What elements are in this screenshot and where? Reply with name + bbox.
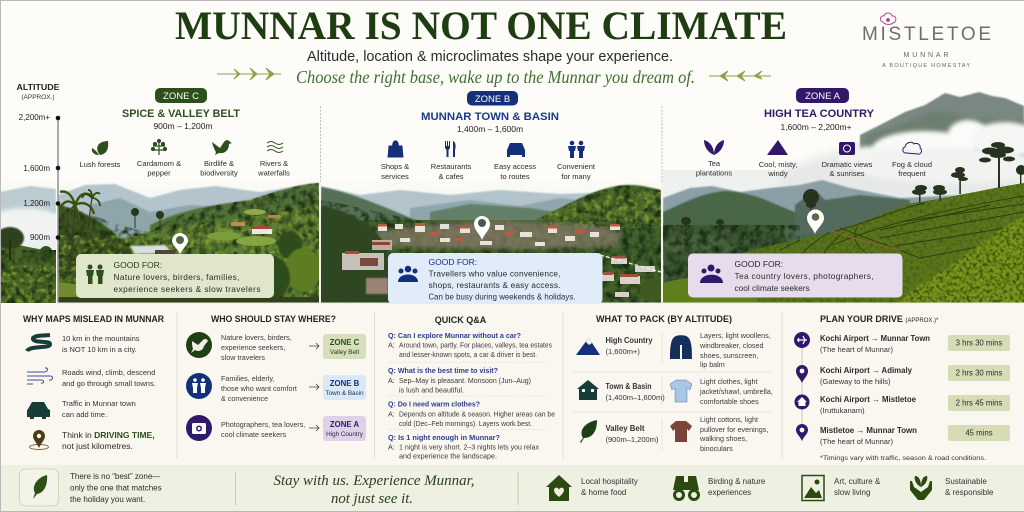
question 4: 1 night is very short. 2–3 nights lets you relax	[399, 442, 539, 452]
text: high country packing: Layers, light woollens,	[700, 331, 771, 340]
text: shops	[381, 162, 409, 181]
text: cardamom: pepper	[147, 168, 171, 178]
text: sustainable: & responsible	[945, 488, 994, 497]
text: cardamom: Cardamom &	[137, 159, 181, 168]
zone C pill	[155, 88, 207, 103]
text: tea	[696, 159, 732, 178]
photo: zone C valley landscape	[58, 170, 321, 303]
time 4: 45 mins	[965, 428, 993, 438]
photo: zone B town landscape	[321, 184, 661, 302]
icon: tea leaves	[704, 140, 724, 155]
text: shops: Shops &	[381, 162, 409, 171]
text: restaurants: Restaurants	[431, 162, 471, 171]
map pin zone C	[172, 233, 188, 254]
text: birdlife: biodiversity	[200, 168, 238, 178]
text: no best zone: only the one that matches	[70, 484, 162, 492]
altitude scale: 900m	[30, 233, 50, 242]
logo flower	[880, 13, 896, 24]
icon: cloud	[903, 142, 921, 154]
text: birding: Birding & nature	[708, 477, 766, 486]
text: fog	[892, 160, 932, 178]
text: valley belt: (900m–1,200m)	[606, 435, 659, 444]
arrow	[309, 425, 319, 431]
zone dividers	[320, 106, 662, 182]
time 1: 3 hrs 30 mins	[956, 338, 1002, 348]
heading: WHY MAPS MISLEAD IN MUNNAR	[23, 314, 164, 324]
callout: zone A good for: GOOD FOR:	[734, 259, 783, 269]
photo: zone A tea country with mountain	[663, 92, 1024, 303]
altitude heading: ALTITUDE	[16, 83, 60, 92]
icon: group	[700, 264, 723, 283]
route 3: Kochi Airport → Mistletoe	[820, 395, 917, 404]
text: restaurants	[431, 162, 471, 181]
icon: restaurant	[445, 141, 456, 157]
text: sustainable: Sustainable	[945, 477, 987, 486]
zone B heading: MUNNAR TOWN & BASIN	[421, 111, 559, 123]
question 4: Q: Is 1 night enough in Munnar?	[388, 433, 500, 442]
icon: leaf	[580, 420, 597, 443]
zone B tag: ZONE B	[330, 379, 360, 388]
text: traffic: can add time.	[62, 410, 107, 419]
text: hospitality: & home food	[581, 488, 626, 497]
zone C tag	[323, 334, 366, 359]
text: town and basin: (1,400m–1,600m)	[606, 393, 665, 402]
text: high country: High Country	[606, 336, 653, 345]
icon: t-shirt	[670, 421, 692, 442]
question 4: A:	[388, 442, 395, 452]
route 2: Kochi Airport → Adimaly	[820, 366, 913, 375]
time 2	[948, 365, 1010, 381]
text: town packing: jacket/shawl, umbrella,	[699, 387, 773, 396]
route 1	[820, 334, 930, 354]
footnote: *Timings vary with traffic, season & road conditions.	[820, 455, 986, 462]
text: families	[221, 374, 297, 403]
text: fog: frequent	[898, 169, 927, 178]
icon: car	[507, 143, 525, 157]
zone A tag: ZONE A	[330, 420, 359, 429]
question 2: is lush and beautiful.	[399, 386, 464, 394]
icon: pin	[796, 365, 808, 383]
icon: home with heart	[546, 475, 572, 501]
script closing line: Stay with us. Experience Munnar,	[274, 473, 474, 489]
text: rivers	[257, 159, 290, 178]
question 3: Depends on altitude & season. Higher areas can be	[399, 410, 555, 418]
icon: family badge	[186, 373, 212, 399]
panel: zone C header: Lush forests	[80, 160, 121, 169]
question 4: and experience the landscape.	[399, 452, 497, 460]
text: photographers: cool climate seekers	[221, 430, 287, 439]
route 2	[820, 366, 913, 386]
icon: pin	[796, 424, 808, 441]
route 3: (Iruttukanam)	[820, 406, 865, 415]
text: restaurants: & cafes	[438, 172, 464, 181]
text: tea: Tea	[708, 159, 721, 168]
icon: car	[27, 402, 50, 419]
zone C heading: SPICE & VALLEY BELT	[122, 108, 240, 120]
icon: mountains	[576, 338, 600, 355]
text: roads	[62, 368, 156, 388]
script tagline: Choose the right base, wake up to the Munnar you dream of.	[296, 67, 695, 87]
text: driving time	[62, 430, 155, 451]
icon: cardamom and pepper	[152, 140, 166, 155]
zone A altitude: 1,600m – 2,200m+	[780, 122, 852, 132]
time 1	[948, 335, 1010, 351]
text: dramatic: & sunrises	[829, 169, 865, 178]
callout: zone B good for: GOOD FOR:	[428, 257, 477, 267]
zone B tag	[323, 375, 366, 400]
text: valley packing: pullover for evenings,	[700, 425, 768, 434]
panel: quick Q&A	[388, 315, 555, 460]
zone B pill: ZONE B	[475, 94, 510, 105]
text: hospitality: Local hospitality	[581, 477, 638, 486]
question 2: A:	[388, 376, 395, 385]
icon: hands with plant	[910, 476, 932, 500]
text: high country packing: windbreaker, closed	[699, 341, 764, 350]
text: families: Families, elderly,	[221, 374, 274, 383]
logo place: MUNNAR	[904, 52, 948, 59]
panel: what to pack	[572, 314, 773, 453]
question 2: Sep–May is pleasant. Monsoon (Jun–Aug)	[399, 376, 531, 385]
text: nature lovers: Nature lovers, birders,	[221, 333, 292, 342]
zone A tag	[323, 416, 366, 441]
time 3	[948, 395, 1010, 411]
text: traffic: Traffic in Munnar town	[62, 399, 136, 408]
text: nature lovers: experience seekers,	[221, 343, 285, 352]
callout: zone B good for: Travellers who value convenience,	[428, 268, 560, 278]
text: no best zone: the holiday you want.	[70, 495, 145, 504]
text: rivers: Rivers &	[260, 159, 288, 168]
altitude scale: 1,600m	[23, 164, 50, 173]
lower section background	[1, 304, 1024, 465]
text: art	[834, 477, 881, 497]
zone A pill	[796, 88, 849, 103]
text: photographers	[221, 420, 305, 439]
text: valley packing	[699, 415, 768, 453]
route 2: (Gateway to the hills)	[820, 377, 891, 386]
text: high country packing	[699, 331, 771, 369]
text: birdlife: Birdlife &	[204, 159, 234, 168]
text: easy access: to routes	[500, 172, 530, 181]
callout: zone B good for: Can be busy during weekends & holidays.	[428, 292, 576, 302]
icon: winding road	[27, 335, 50, 351]
text: families: & convenience	[221, 394, 268, 403]
zone C tag: Valley Belt	[330, 349, 359, 356]
text: driving time: not just kilometres.	[62, 441, 133, 451]
icon: location pin	[30, 430, 48, 450]
zone C tag: ZONE C	[330, 338, 360, 347]
zone B altitude: 1,400m – 1,600m	[457, 124, 523, 134]
text: driving time: Think in DRIVING TIME,	[62, 430, 155, 440]
icon: people	[86, 264, 104, 284]
arrow	[309, 384, 319, 390]
text: shops: services	[381, 172, 409, 181]
panel: why maps mislead	[23, 314, 164, 451]
text: birding	[708, 477, 766, 497]
text: distance: 10 km in the mountains	[62, 334, 140, 343]
arrow	[309, 343, 319, 349]
callout: zone C good for: experience seekers & slow travelers	[114, 284, 260, 294]
zone A tag: High Country	[326, 431, 364, 438]
text: cool	[759, 160, 797, 178]
route 1: (The heart of Munnar)	[820, 345, 893, 354]
zone C pill: ZONE C	[163, 91, 199, 102]
title: MUNNAR IS NOT ONE CLIMATE	[175, 3, 787, 48]
callout: zone A good for: Tea country lovers, photographers,	[734, 271, 874, 281]
icon: jacket	[670, 335, 692, 359]
text: valley belt: Valley Belt	[606, 424, 645, 433]
text: art: slow living	[834, 488, 870, 497]
text: rivers: waterfalls	[257, 168, 290, 178]
subtitle: Altitude, location & microclimates shape your experience.	[307, 48, 673, 65]
icon: binoculars	[673, 476, 700, 501]
icon: picture	[802, 476, 824, 500]
text: families: those who want comfort	[221, 384, 297, 393]
decorative leaf sprig left	[217, 68, 281, 80]
icon: mountain	[767, 140, 788, 155]
time 2: 2 hrs 30 mins	[956, 368, 1002, 378]
callout: zone C good for: Nature lovers, birders, families,	[114, 272, 240, 282]
text: cool: windy	[767, 169, 788, 178]
panel: zone C header	[80, 88, 290, 178]
text: fog: Fog & cloud	[892, 160, 932, 169]
text: art: Art, culture &	[834, 477, 881, 486]
text: valley packing: walking shoes,	[699, 434, 747, 443]
decorative leaf sprig right	[709, 71, 771, 81]
altitude scale: 1,200m	[23, 199, 50, 208]
question 4	[388, 433, 539, 460]
icon: group	[398, 266, 418, 282]
question 2	[388, 366, 531, 394]
icon: camera	[839, 142, 855, 155]
icon: shopping bag	[388, 141, 403, 157]
callout: zone C good for: GOOD FOR:	[114, 260, 162, 270]
text: valley belt	[606, 424, 659, 444]
panel: zone B header	[381, 91, 596, 181]
zone B tag: Town & Basin	[325, 390, 364, 397]
text: traffic	[62, 399, 136, 419]
text: hospitality	[581, 477, 638, 497]
text: high country packing: shoes, sunscreen,	[700, 351, 758, 360]
script closing line	[274, 473, 474, 507]
icon: wind	[27, 368, 53, 384]
icon: camera badge	[186, 415, 212, 441]
text: no best zone	[70, 472, 162, 504]
text: town and basin	[606, 382, 665, 402]
logo wordmark: MISTLETOE	[862, 24, 991, 45]
text: convenient	[557, 162, 596, 181]
text: birding: experiences	[708, 488, 751, 497]
map pin zone A	[807, 210, 824, 234]
cover fade above photos	[0, 170, 660, 184]
text: cool: Cool, misty,	[759, 160, 797, 169]
icon: two people	[568, 141, 585, 158]
callout: zone C good for	[76, 254, 274, 298]
route 3	[820, 395, 917, 415]
text: high country: (1,600m+)	[606, 347, 640, 356]
route 4	[820, 426, 917, 446]
text: tea: plantations	[696, 168, 732, 178]
icon: rivers	[267, 142, 283, 152]
icon: home	[794, 394, 810, 410]
text: sustainable	[945, 477, 994, 497]
altitude scale: (APPROX.)	[21, 94, 55, 101]
altitude scale: 2,200m+	[19, 113, 50, 122]
question 3: cold (Dec–Feb mornings). Layers work best.	[399, 419, 532, 428]
question 1: Around town, partly. For places, valleys, tea estates	[399, 340, 552, 350]
text: high country packing: lip balm	[700, 360, 725, 369]
icon: shirt	[670, 380, 692, 402]
question 1: Q: Can I explore Munnar without a car?	[388, 331, 521, 340]
zone A pill: ZONE A	[805, 91, 841, 102]
text: distance	[62, 334, 140, 354]
text: dramatic: Dramatic views	[822, 160, 873, 169]
time 4	[948, 425, 1010, 441]
panel: plan your drive	[794, 314, 1010, 462]
question 1: A:	[388, 340, 395, 350]
callout: zone A good for: cool climate seekers	[734, 283, 810, 293]
text: town packing	[699, 377, 773, 406]
callout: zone A good for	[688, 254, 902, 298]
text: birdlife	[200, 159, 238, 178]
text: town packing: comfortable shoes	[700, 397, 759, 406]
panel: zone A header	[696, 88, 932, 178]
icon: bird	[212, 140, 232, 155]
icon: leaf badge	[20, 469, 58, 506]
text: town packing: Light clothes, light	[700, 377, 758, 386]
zone B pill	[467, 91, 518, 106]
zone A heading: HIGH TEA COUNTRY	[764, 108, 875, 120]
heading: PLAN YOUR DRIVE (APPROX.)*	[820, 314, 939, 324]
panel: footer band	[1, 465, 1024, 512]
icon: lush forests	[92, 141, 108, 155]
question 1: and lesser-known spots, a car & driver is best.	[399, 350, 537, 359]
route 4: Mistletoe → Munnar Town	[820, 426, 917, 435]
heading: WHAT TO PACK (BY ALTITUDE)	[596, 314, 732, 324]
text: valley packing: binoculars	[700, 444, 733, 453]
icon: house	[577, 380, 599, 400]
text: convenient: Convenient	[557, 162, 596, 171]
heading: QUICK Q&A	[435, 315, 487, 325]
text: roads: Roads wind, climb, descend	[62, 368, 155, 377]
question 3: A:	[388, 410, 395, 418]
zone C altitude: 900m – 1,200m	[153, 121, 213, 131]
text: valley packing: Light cottons, light	[700, 415, 758, 424]
question 3: Q: Do I need warm clothes?	[388, 400, 480, 408]
text: town and basin: Town & Basin	[606, 382, 652, 391]
text: distance: is NOT 10 km in a city.	[62, 345, 137, 354]
text: cardamom	[137, 159, 181, 178]
text: easy access: Easy access	[494, 162, 536, 171]
callout: zone B good for: shops, restaurants & easy access.	[428, 280, 560, 290]
text: roads: and go through small towns.	[62, 379, 156, 388]
text: easy access	[494, 162, 536, 181]
photo: far-left altitude strip	[1, 185, 56, 303]
route 4: (The heart of Munnar)	[820, 437, 893, 446]
route 1: Kochi Airport → Munnar Town	[820, 334, 930, 343]
text: nature lovers: slow travelers	[221, 353, 265, 362]
text: dramatic	[822, 160, 873, 178]
heading: WHO SHOULD STAY WHERE?	[211, 314, 336, 324]
question 3	[388, 400, 555, 428]
altitude scale	[16, 83, 60, 303]
text: no best zone: There is no “best” zone—	[70, 472, 160, 481]
script closing line: not just see it.	[331, 491, 413, 507]
callout: zone B good for	[388, 253, 602, 304]
icon: plane	[794, 332, 810, 348]
time 3: 2 hrs 45 mins	[956, 398, 1002, 408]
question 1	[388, 331, 552, 359]
text: convenient: for many	[561, 172, 591, 181]
question 2: Q: What is the best time to visit?	[388, 366, 498, 375]
text: photographers: Photographers, tea lovers,	[221, 420, 305, 429]
panel: who should stay where	[186, 314, 366, 441]
text: nature lovers	[221, 333, 292, 362]
logo tagline: A BOUTIQUE HOMESTAY	[882, 63, 970, 69]
logo: Mistletoe Munnar	[862, 13, 991, 69]
text: high country	[606, 336, 653, 356]
map pin zone B	[474, 216, 490, 240]
icon: bird badge	[186, 332, 212, 358]
